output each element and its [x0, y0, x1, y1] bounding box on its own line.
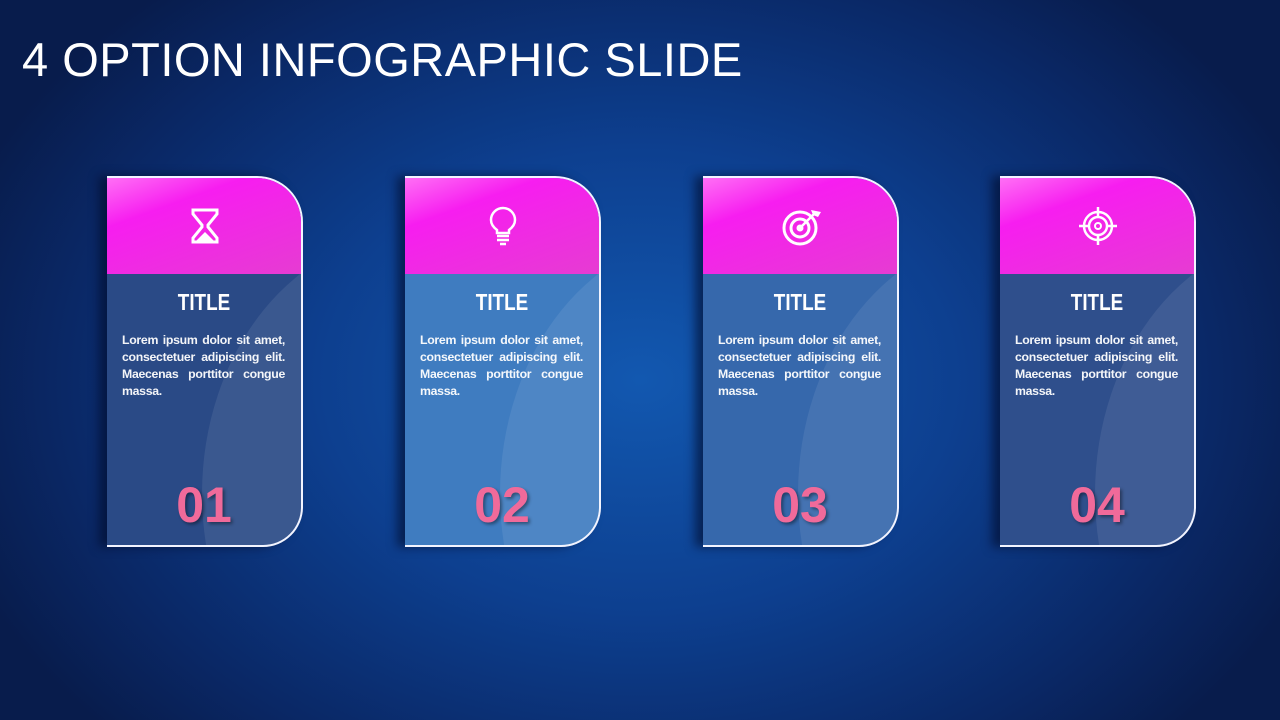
text 4: Lorem ipsum dolor sit amet, consectetuer adipiscing elit. Maecenas porttitor congue massa.: [1015, 333, 1178, 398]
icon: crosshair: [1079, 207, 1117, 245]
header 3: [703, 178, 897, 274]
icon: hourglass: [192, 208, 218, 244]
number 1: 01: [176, 477, 232, 533]
card 4: [1000, 176, 1196, 547]
card 2: [405, 176, 601, 547]
card 3: [703, 176, 899, 547]
number 3: 03: [772, 477, 828, 533]
number 2: 02: [474, 477, 530, 533]
title 4: TITLE: [1071, 289, 1123, 315]
icon: target: [782, 210, 821, 246]
card 1: [107, 176, 303, 547]
title 2: TITLE: [476, 289, 528, 315]
header 2: [405, 178, 599, 274]
title 1: TITLE: [178, 289, 230, 315]
text 3: Lorem ipsum dolor sit amet, consectetuer adipiscing elit. Maecenas porttitor congue massa.: [718, 333, 881, 398]
text 2: Lorem ipsum dolor sit amet, consectetuer adipiscing elit. Maecenas porttitor congue massa.: [420, 333, 583, 398]
header 4: [1000, 178, 1194, 274]
title: 4 OPTION INFOGRAPHIC SLIDE: [22, 33, 743, 86]
title 3: TITLE: [774, 289, 826, 315]
header 1: [107, 178, 301, 274]
text 1: Lorem ipsum dolor sit amet, consectetuer adipiscing elit. Maecenas porttitor congue massa.: [122, 333, 285, 398]
number 4: 04: [1069, 477, 1125, 533]
icon: lightbulb: [490, 206, 516, 246]
